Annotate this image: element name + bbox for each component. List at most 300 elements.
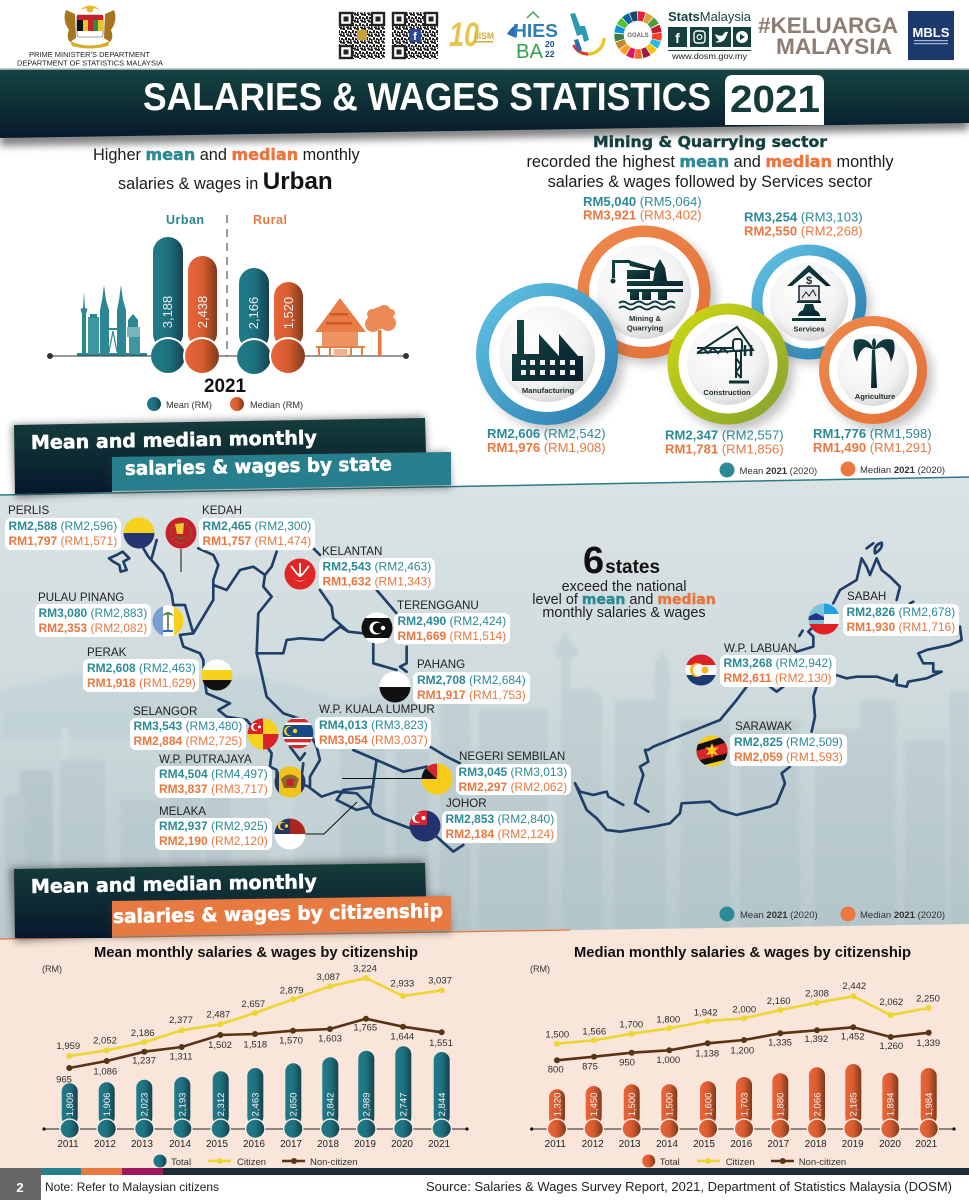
labels: mean chart years: 2016 [243, 1139, 265, 1150]
state: Pulau Pinang: PULAU PINANG [38, 591, 124, 604]
flag: Terengganu [361, 612, 393, 644]
bar: rural median 1,520: 1,520 [281, 297, 296, 329]
state: Johor [409, 797, 557, 843]
labels: median non-citizen values: 1,260 [879, 1041, 903, 1052]
icon: city skyline [77, 285, 147, 356]
map: borneo outline [575, 543, 962, 832]
state: W.P. Kuala Lumpur: RM3,054 (RM3,037) [319, 733, 428, 747]
text: construction values: RM1,781 (RM1,856) [665, 442, 784, 456]
labels: median chart years: 2021 [915, 1139, 937, 1150]
labels: median non-citizen values: 1,000 [656, 1055, 680, 1066]
callout: six states: 6states [583, 540, 660, 582]
state: Perlis: RM1,797 (RM1,571) [8, 534, 117, 548]
text: mining label: Mining & [629, 314, 662, 323]
heading: sector statement: Mining & Quarrying sector [593, 133, 828, 151]
legend: state map: Median 2021 (2020) [860, 910, 945, 921]
labels: mean chart years: 2011 [57, 1139, 79, 1150]
state: W.P. Kuala Lumpur [282, 703, 435, 749]
labels: median citizen values: 1,500 [545, 1030, 569, 1041]
heading: urban statement: Higher mean and median monthly [93, 145, 360, 164]
page number [0, 1168, 41, 1200]
state: W.P. Putrajaya [155, 753, 306, 798]
line: median non-citizen [554, 1024, 932, 1063]
icon: MBLS logo [908, 11, 954, 60]
text: construction values [665, 428, 784, 456]
circle: construction [668, 304, 794, 431]
legend: median chart [642, 1154, 846, 1168]
state: Perlis: RM2,588 (RM2,596) [8, 519, 117, 533]
text: mining values: RM3,921 (RM3,402) [583, 208, 702, 222]
icon: SDG wheel [611, 8, 665, 62]
legend: urban rural [147, 397, 303, 411]
labels: median chart years: 2011 [545, 1139, 566, 1150]
labels: mean citizen values: 3,037 [428, 975, 452, 986]
line: median citizen [554, 993, 932, 1047]
state: Sabah [808, 590, 959, 636]
title banner [0, 68, 969, 146]
text: mining label [627, 314, 664, 332]
labels: mean chart years: 2015 [206, 1139, 228, 1150]
state: Melaka: RM2,937 (RM2,925) [159, 819, 268, 833]
bar values: median total: 1,500 [665, 1093, 676, 1116]
labels: median non-citizen values: 875 [582, 1061, 598, 1072]
icon: HIES BA 2022 logo [507, 12, 558, 63]
labels: median non-citizen values: 1,335 [768, 1037, 792, 1048]
icon: StatsMalaysia social block: f [675, 30, 680, 46]
section heading: by state [12, 416, 452, 498]
flag: Sabah [808, 603, 840, 635]
bar values: mean total: 2,312 [216, 1093, 227, 1116]
bar values: mean total: 2,023 [140, 1093, 151, 1116]
icon: StatsMalaysia social block: StatsMalaysia [668, 9, 752, 24]
heading: main title: SALARIES & WAGES STATISTICS [143, 76, 711, 119]
labels: median chart years: 2019 [842, 1139, 864, 1150]
labels: median citizen values: 1,566 [582, 1027, 606, 1038]
labels: median citizen values: 2,250 [916, 993, 940, 1004]
heading: urban statement [93, 145, 360, 195]
labels: median citizen values: 2,160 [767, 996, 791, 1007]
bar values: median total: 1,320 [552, 1093, 563, 1116]
state: Negeri Sembilan: NEGERI SEMBILAN [459, 750, 565, 763]
labels: mean non-citizen values: 1,644 [390, 1031, 414, 1042]
text: urban column label: Urban [166, 213, 204, 227]
state: Sarawak [696, 720, 847, 767]
legend: mean chart [154, 1154, 358, 1168]
text: manufacturing values [487, 426, 606, 455]
icon: Keluarga Malaysia logo: MALAYSIA [776, 34, 892, 59]
labels: mean citizen values: 3,224 [353, 964, 377, 975]
labels: median citizen values: 2,442 [842, 981, 866, 992]
state: Selangor [130, 705, 279, 750]
text: mining values [583, 194, 702, 222]
labels: mean citizen values: 3,087 [316, 972, 340, 983]
panel: citizenship charts background [0, 924, 969, 1170]
icon: house with monitor: $ [806, 275, 812, 287]
labels: mean non-citizen values: 1,570 [279, 1036, 303, 1047]
legend: mean chart: Non-citizen [310, 1157, 358, 1168]
text: agriculture values: RM1,490 (RM1,291) [813, 440, 932, 455]
state: Perak: RM1,918 (RM1,629) [87, 676, 196, 690]
labels: median citizen values: 2,000 [732, 1004, 756, 1015]
bar values: mean total [65, 1093, 448, 1116]
icon: HIES BA 2022 logo: 20 [545, 39, 555, 49]
callout: six states [532, 540, 716, 621]
text: services label: Services [793, 324, 825, 334]
bar values: median total: 1,450 [589, 1093, 600, 1116]
bar values: mean total: 2,747 [399, 1093, 410, 1116]
bar values: median total: 1,894 [886, 1093, 897, 1116]
legend: sector [720, 462, 945, 478]
icon: tower crane [697, 327, 753, 382]
flag: Kelantan [284, 558, 316, 590]
icon: ISM 10 years logo: 10 [449, 16, 479, 54]
labels: median citizen values: 2,308 [805, 989, 829, 1000]
state: W.P. Kuala Lumpur: RM4,013 (RM3,823) [319, 718, 428, 732]
flag: Perak [201, 659, 233, 691]
text: source: Source: Salaries & Wages Survey Report, 2021, Department of Statistics Malaysia (DOSM) [426, 1180, 952, 1194]
legend: median chart: Citizen [726, 1157, 755, 1168]
bar: rural mean 2,166 [235, 268, 273, 376]
icon: palm tree [853, 338, 895, 388]
text: manufacturing values: RM1,976 (RM1,908) [487, 440, 606, 455]
labels: mean chart years: 2019 [354, 1139, 376, 1150]
bar: rural mean 2,166: 2,166 [246, 297, 261, 329]
state: Kelantan: RM2,543 (RM2,463) [322, 560, 431, 574]
labels: mean chart years [57, 1139, 450, 1150]
bar values: median total: 1,703 [739, 1093, 750, 1116]
state: Terengganu [361, 599, 510, 644]
flag: Sarawak [696, 735, 728, 767]
text: manufacturing values: RM2,606 (RM2,542) [487, 426, 606, 441]
labels: median citizen values: 1,800 [656, 1014, 680, 1025]
text: chart year: 2021 [204, 376, 246, 397]
labels: median non-citizen values: 950 [619, 1058, 635, 1069]
bar: urban mean 3,188 [149, 237, 187, 375]
chart: mean by citizenship [42, 944, 469, 1168]
labels: mean chart years: 2012 [94, 1139, 116, 1150]
labels: median chart years: 2020 [879, 1139, 901, 1150]
legend: mean chart: Citizen [237, 1157, 266, 1168]
section heading: by state: Mean and median monthly [31, 427, 318, 454]
bar values: median total [552, 1093, 935, 1116]
state: Melaka [155, 805, 306, 850]
state: W.P. Labuan: W.P. LABUAN [724, 642, 797, 655]
flag: W.P. Putrajaya [274, 766, 306, 798]
bar values: mean total: 2,193 [178, 1093, 189, 1116]
labels: median chart years: 2017 [767, 1139, 789, 1150]
heading: mean chart title: Mean monthly salaries & wages by citizenship [94, 944, 418, 961]
state: Perak [83, 646, 233, 692]
legend: state map: Mean 2021 (2020) [740, 910, 818, 921]
bar values: median total: 1,880 [776, 1093, 787, 1116]
state: Perak: PERAK [87, 646, 127, 659]
icon: QR code one [339, 12, 385, 59]
icon: swoosh logo [570, 13, 604, 54]
labels: mean citizen values: 2,657 [241, 999, 265, 1010]
bar values: mean total: 1,809 [65, 1093, 76, 1116]
labels: mean citizen values: 2,186 [131, 1028, 155, 1039]
state: Pahang: RM2,708 (RM2,684) [417, 673, 526, 687]
state: Selangor: RM3,543 (RM3,480) [134, 719, 242, 733]
heading: sector statement [526, 133, 894, 191]
heading: median chart title: Median monthly salaries & wages by citizenship [574, 944, 911, 961]
labels: median citizen values: 1,942 [694, 1007, 718, 1018]
state: Melaka: MELAKA [159, 805, 206, 818]
labels: median citizen values: 2,062 [879, 997, 903, 1008]
icon: HIES BA 2022 logo: 22 [545, 49, 555, 59]
state: Kedah [165, 504, 315, 550]
bar values: median total: 1,984 [924, 1093, 935, 1116]
heading: urban statement: salaries & wages in Urban [118, 168, 333, 195]
bar values: mean total: 2,650 [289, 1093, 300, 1116]
state: Johor: JOHOR [446, 797, 487, 810]
legend: mean chart: Total [171, 1157, 191, 1168]
labels: mean non-citizen values: 1,603 [318, 1033, 342, 1044]
labels: mean non-citizen values: 965 [56, 1074, 72, 1085]
state: Terengganu: RM2,490 (RM2,424) [398, 614, 506, 628]
flag: Kedah [165, 517, 197, 549]
circle: services [752, 244, 871, 365]
bar values: mean total: 2,844 [437, 1093, 448, 1116]
bar values: median total: 2,066 [812, 1093, 823, 1116]
header logo strip [17, 6, 954, 68]
labels: median chart years: 2012 [582, 1139, 604, 1150]
icon: QR code two [392, 12, 438, 59]
bar values: median total: 1,600 [703, 1093, 714, 1116]
labels: median non-citizen values: 1,452 [841, 1032, 865, 1043]
footer bar [0, 1168, 969, 1200]
map: peninsular outline [109, 540, 463, 852]
icon: StatsMalaysia social block [668, 9, 752, 61]
callout: six states: level of mean and median [532, 592, 716, 608]
icon: Keluarga Malaysia logo: #KELUARGA [758, 13, 898, 38]
state: Pulau Pinang: RM2,353 (RM2,082) [38, 621, 147, 635]
heading: sector statement: recorded the highest mean and median monthly [526, 152, 894, 171]
section heading: by citizenship: salaries & wages by citizenship [113, 900, 443, 928]
state: Sabah: SABAH [847, 590, 886, 603]
flag: Johor [409, 810, 441, 842]
state: Perlis [5, 504, 155, 550]
labels: mean non-citizen values: 1,311 [169, 1052, 193, 1063]
section heading: by state: salaries & wages by state [125, 453, 392, 480]
panel: sector comparison [476, 133, 945, 478]
legend: sector: Mean 2021 (2020) [740, 466, 817, 477]
circle: manufacturing [476, 283, 624, 431]
labels: median non-citizen values: 1,200 [730, 1046, 754, 1057]
labels: mean chart years: 2020 [391, 1139, 413, 1150]
labels: mean non-citizen values: 1,551 [429, 1038, 453, 1049]
line: mean non-citizen [66, 1016, 445, 1071]
bar: urban median 2,438 [183, 256, 221, 375]
bar values: mean total: 2,463 [251, 1093, 262, 1116]
state: Kelantan: KELANTAN [322, 545, 382, 558]
state: Melaka: RM2,190 (RM2,120) [159, 834, 268, 848]
labels: mean non-citizen values: 1,237 [132, 1056, 156, 1067]
state: Sarawak: RM2,825 (RM2,509) [734, 735, 843, 749]
bars: mean total [59, 1046, 452, 1139]
labels: median chart years: 2013 [619, 1139, 641, 1150]
labels: median chart years [545, 1139, 937, 1150]
state: Negeri Sembilan [421, 750, 571, 795]
state: Kelantan [284, 545, 435, 590]
flag: Melaka [274, 818, 306, 850]
bar: urban median 2,438: 2,438 [195, 296, 210, 328]
labels: mean non-citizen values: 1,518 [243, 1039, 267, 1050]
labels: median non-citizen values: 1,138 [695, 1048, 719, 1059]
text: ministry name: DEPARTMENT OF STATISTICS MALAYSIA [17, 58, 163, 68]
icon: factory [512, 320, 583, 381]
state: Sarawak: SARAWAK [735, 720, 792, 733]
state: Terengganu: RM1,669 (RM1,514) [398, 629, 506, 643]
text: mining values: RM5,040 (RM5,064) [583, 194, 702, 209]
state: Pulau Pinang [35, 591, 184, 637]
text: construction values: RM2,347 (RM2,557) [665, 428, 784, 442]
page number: 2 [16, 1180, 24, 1195]
text: rural column label: Rural [253, 213, 287, 227]
state: Selangor: RM2,884 (RM2,725) [134, 734, 242, 748]
flag: Pahang [379, 671, 411, 703]
flag: Pulau Pinang [152, 605, 184, 637]
circle: agriculture [819, 316, 933, 430]
text: mining label: Quarrying [627, 324, 664, 332]
text: agriculture label: Agriculture [855, 392, 895, 401]
state: W.P. Putrajaya: RM4,504 (RM4,497) [159, 767, 268, 781]
icon: HIES BA 2022 logo: HIES [513, 21, 558, 41]
state: Perak: RM2,608 (RM2,463) [87, 661, 196, 675]
state: W.P. Labuan [685, 642, 836, 687]
labels: median non-citizen values: 800 [548, 1064, 564, 1075]
text: note: Note: Refer to Malaysian citizens [45, 1180, 219, 1194]
labels: mean citizen values: 2,879 [280, 985, 304, 996]
state: Kelantan: RM1,632 (RM1,343) [322, 574, 431, 588]
chart axis [530, 1127, 956, 1131]
text: agriculture values [813, 426, 932, 455]
state: Sabah: RM2,826 (RM2,678) [846, 605, 955, 619]
flag: W.P. Labuan [685, 654, 717, 686]
legend: state map [720, 906, 945, 922]
panel: state map [0, 477, 969, 945]
bar values: mean total: 2,842 [326, 1093, 337, 1116]
bar values: median total: 2,185 [849, 1093, 860, 1116]
section heading: by citizenship [10, 860, 452, 942]
labels: mean citizen values: 1,959 [56, 1041, 80, 1052]
state: Selangor: SELANGOR [133, 705, 197, 718]
bar values: median total: 1,500 [627, 1093, 638, 1116]
labels: mean non-citizen values [56, 1023, 453, 1085]
labels: mean citizen values: 2,487 [206, 1010, 230, 1021]
circle: mining and quarrying [578, 226, 716, 364]
labels: median citizen values: 1,700 [619, 1020, 643, 1031]
icon: offshore rig [610, 259, 683, 310]
icon: MBLS logo: MBLS [912, 26, 950, 40]
state: Kedah: KEDAH [202, 504, 242, 517]
icon: ISM 10 years logo: IIISM [474, 31, 494, 41]
state: W.P. Labuan: RM2,611 (RM2,130) [724, 671, 832, 685]
chart axis [42, 1127, 469, 1131]
bar values: mean total: 2,989 [362, 1093, 373, 1116]
labels: median non-citizen values: 1,339 [916, 1038, 940, 1049]
text: services values: RM2,550 (RM2,268) [744, 224, 863, 238]
heading: sector statement: salaries & wages followed by Services sector [548, 173, 873, 191]
bar: rural median 1,520 [269, 282, 307, 375]
legend: sector: Median 2021 (2020) [860, 465, 945, 476]
legend: urban rural: Mean (RM) [166, 400, 212, 410]
labels: median chart years: 2014 [656, 1139, 678, 1150]
labels: mean citizen values [56, 964, 452, 1052]
state: Pulau Pinang: RM3,080 (RM2,883) [38, 606, 147, 620]
bar: urban mean 3,188: 3,188 [160, 296, 175, 328]
line: mean citizen [66, 975, 445, 1059]
text: ministry name: PRIME MINISTER'S DEPARTMENT [29, 50, 151, 59]
state: W.P. Labuan: RM3,268 (RM2,942) [724, 656, 832, 670]
text: construction label: Construction [703, 388, 751, 397]
labels: mean citizen values: 2,052 [93, 1036, 117, 1047]
labels: mean citizen values: 2,933 [390, 979, 414, 990]
icon: Keluarga Malaysia logo [758, 13, 898, 59]
state: Pahang [379, 658, 530, 704]
labels: median chart years: 2018 [805, 1139, 827, 1150]
text: services values: RM3,254 (RM3,103) [744, 210, 863, 224]
labels: mean chart years: 2021 [428, 1139, 450, 1150]
labels: median citizen values [545, 981, 940, 1041]
text: manufacturing label: Manufacturing [522, 386, 575, 395]
callout: six states: monthly salaries & wages [542, 605, 706, 621]
section heading: by citizenship: Mean and median monthly [31, 871, 318, 898]
icon: StatsMalaysia social block: www.dosm.gov.my [671, 52, 748, 61]
bars: median total [547, 1064, 939, 1139]
state: Terengganu: TERENGGANU [397, 599, 479, 612]
legend: median chart: Non-citizen [799, 1157, 846, 1168]
icon: QR code two: f [413, 31, 417, 43]
icon: tree [365, 305, 396, 356]
labels: mean non-citizen values: 1,765 [353, 1023, 377, 1034]
heading: year badge: 2021 [730, 79, 820, 121]
legend: median chart: Total [660, 1157, 680, 1168]
state: W.P. Putrajaya: RM3,837 (RM3,717) [159, 782, 268, 796]
state: Johor: RM2,853 (RM2,840) [446, 812, 554, 826]
panel: urban vs rural [47, 145, 409, 411]
flag: Selangor [247, 718, 279, 750]
state: Sabah: RM1,930 (RM1,716) [846, 620, 955, 634]
text: services values [744, 210, 863, 238]
state: Negeri Sembilan: RM2,297 (RM2,062) [458, 780, 567, 794]
bar values: mean total: 1,906 [102, 1093, 113, 1116]
icon: HIES BA 2022 logo: BA [516, 41, 544, 63]
labels: mean chart years: 2018 [317, 1139, 339, 1150]
axis line [47, 353, 409, 359]
state: Pahang: RM1,917 (RM1,753) [417, 688, 526, 702]
state: Kedah: RM2,465 (RM2,300) [202, 519, 311, 533]
flag: W.P. Kuala Lumpur [282, 717, 314, 749]
text: agriculture values: RM1,776 (RM1,598) [813, 426, 932, 441]
labels: mean chart years: 2013 [131, 1139, 153, 1150]
flag: Negeri Sembilan [421, 763, 453, 795]
state: W.P. Kuala Lumpur: W.P. KUALA LUMPUR [319, 703, 435, 716]
labels: mean non-citizen values: 1,086 [93, 1066, 117, 1077]
labels: mean chart years: 2014 [169, 1139, 191, 1150]
labels: median chart years: 2015 [693, 1139, 715, 1150]
state: Johor: RM2,184 (RM2,124) [446, 827, 554, 841]
text: mean chart unit: (RM) [42, 964, 62, 974]
state: Sarawak: RM2,059 (RM1,593) [734, 750, 843, 764]
labels: median non-citizen values [548, 1032, 940, 1075]
icon: national crest [65, 6, 115, 48]
text: ministry name [17, 50, 163, 68]
chart: median by citizenship [530, 944, 956, 1168]
callout: six states: exceed the national [562, 579, 686, 595]
text: median chart unit: (RM) [530, 964, 550, 974]
icon: SDG wheel: GOALS [627, 33, 649, 39]
